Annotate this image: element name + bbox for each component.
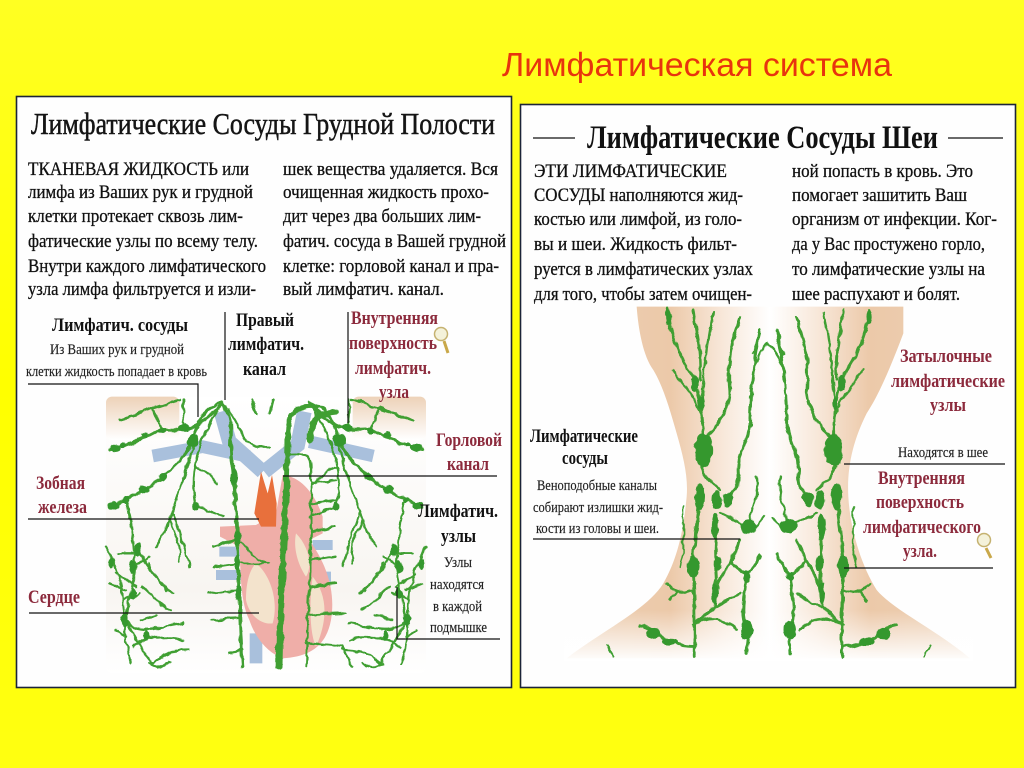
label: neck lymph vessels <box>530 426 663 537</box>
icon: magnifier, chest <box>434 328 448 353</box>
label: right lymphatic duct: канал <box>243 359 286 380</box>
label: inner surface of node <box>863 468 981 562</box>
heading: chest: Лимфатические Сосуды Грудной Полости <box>31 106 495 141</box>
panel: chest lymphatic vessels <box>16 96 512 688</box>
text block: chest, column 1: клетки протекает сквозь лим- <box>28 206 243 227</box>
bottom fade <box>563 610 973 662</box>
label: neck lymph vessels: собирают излишки жид- <box>533 500 663 516</box>
label: neck lymph vessels: кости из головы и шеи. <box>536 521 659 537</box>
label: right lymphatic duct: лимфатич. <box>228 334 304 355</box>
label: occipital nodes: лимфатические <box>891 371 1005 392</box>
text block: neck, column 1: вы и шеи. Жидкость фильт- <box>534 234 737 255</box>
text block: chest, column 2: дит через два больших лим- <box>283 206 481 227</box>
label: lymph vessels: клетки жидкость попадает в кровь <box>26 364 207 380</box>
label: occipital nodes: Затылочные <box>900 346 992 367</box>
label: lymph nodes: Узлы <box>444 555 472 571</box>
label: inner node surface: лимфатич. <box>355 358 431 379</box>
main title: Лимфатическая система <box>502 46 893 83</box>
label: lymph nodes <box>418 501 498 636</box>
text block: chest, column 1: Внутри каждого лимфатического <box>28 256 266 277</box>
label: inner node surface <box>349 308 438 403</box>
label: thoracic duct: Горловой <box>436 430 502 451</box>
chest illustration <box>106 397 426 673</box>
label: inner surface of node: лимфатического <box>863 517 981 538</box>
label: inner surface of node: узла. <box>903 541 937 562</box>
label: lymph vessels: Лимфатич. сосуды <box>52 315 188 336</box>
label: neck lymph vessels: Веноподобные каналы <box>537 478 657 494</box>
text block: neck, column 2: да у Вас простужено горло, <box>792 234 985 255</box>
label: neck lymph vessels: Лимфатические <box>530 426 638 447</box>
label: inner node surface: узла <box>379 382 409 403</box>
text block: chest, column 1: узла лимфа фильтруется и изли- <box>28 279 256 300</box>
label: thymus: железа <box>38 497 87 518</box>
label: inner node surface: Внутренняя <box>351 308 438 329</box>
text block: neck, column 1: для того, чтобы затем очищен- <box>534 284 752 305</box>
text block: chest, column 2: вый лимфатич. канал. <box>283 279 444 300</box>
label: lymph vessels <box>26 315 207 380</box>
text block: neck, column 1: руется в лимфатических узлах <box>534 259 753 280</box>
label: right lymphatic duct: Правый <box>236 310 294 331</box>
torso skin <box>106 397 426 673</box>
text block: neck, column 1: костью или лимфой, из голо- <box>534 209 742 230</box>
icon: magnifier, neck <box>978 534 991 558</box>
label: thymus: Зобная <box>36 473 85 494</box>
text block: chest, column 1 <box>28 159 266 300</box>
text block: neck, column 1: СОСУДЫ наполняются жид- <box>534 185 743 206</box>
heart <box>220 475 332 658</box>
thymus <box>254 472 277 527</box>
neck illustration <box>563 307 973 662</box>
label: thoracic duct: канал <box>447 454 489 475</box>
label: occipital nodes: узлы <box>930 395 966 416</box>
text block: chest, column 2: клетке: горловой канал и пра- <box>283 256 499 277</box>
text block: neck, column 2: организм от инфекции. Ког- <box>792 209 997 230</box>
text block: chest, column 2: фатич. сосуда в Вашей грудной <box>283 231 506 252</box>
lymph network <box>607 309 930 657</box>
text block: chest, column 2 <box>283 159 506 300</box>
text block: neck, column 2: то лимфатические узлы на <box>792 259 986 280</box>
label: thymus <box>36 473 87 518</box>
heading rules <box>533 137 1003 139</box>
leader lines: chest <box>28 312 500 639</box>
label: inner node surface: поверхность <box>349 333 437 354</box>
heading: neck: Лимфатические Сосуды Шеи <box>587 120 938 156</box>
text block: chest, column 1: лимфа из Ваших рук и грудной <box>28 182 253 203</box>
panel: neck lymphatic vessels <box>520 104 1016 688</box>
panel background <box>520 104 1016 688</box>
label: lymph vessels: Из Ваших рук и грудной <box>50 342 184 358</box>
text block: chest, column 2: шек вещества удаляется. Вся <box>283 159 498 180</box>
text block: chest, column 1: ТКАНЕВАЯ ЖИДКОСТЬ или <box>28 159 249 180</box>
text block: neck, column 2: помогает зашитить Ваш <box>792 185 967 206</box>
neck skin <box>567 307 970 658</box>
label: lymph nodes: узлы <box>441 526 476 547</box>
label: thoracic duct <box>436 430 502 475</box>
panel background <box>16 96 512 688</box>
label: lymph nodes: подмышке <box>430 620 487 636</box>
text block: neck, column 2 <box>792 161 997 305</box>
label: lymph nodes: в каждой <box>433 599 482 615</box>
label: right lymphatic duct <box>228 310 304 380</box>
text block: neck, column 2: ной попасть в кровь. Это <box>792 161 973 182</box>
text block: chest, column 1: фатические узлы по всему телу. <box>28 231 258 252</box>
veins <box>153 412 373 663</box>
label: inner surface of node: поверхность <box>876 492 964 513</box>
text block: neck, column 1 <box>534 161 753 305</box>
leader lines: neck <box>533 464 1005 568</box>
text block: chest, column 2: очищенная жидкость прохо- <box>283 182 489 203</box>
label: occipital nodes <box>891 346 1005 416</box>
label: neck lymph vessels: сосуды <box>562 448 608 469</box>
label: lymph nodes: Лимфатич. <box>418 501 498 522</box>
text block: neck, column 1: ЭТИ ЛИМФАТИЧЕСКИЕ <box>534 161 727 182</box>
label: located in neck: Находятся в шее <box>898 445 988 461</box>
text block: neck, column 2: шее распухают и болят. <box>792 284 960 305</box>
lymph network <box>106 400 426 667</box>
label: inner surface of node: Внутренняя <box>878 468 965 489</box>
label: lymph nodes: находятся <box>430 577 484 593</box>
label: heart: Сердце <box>28 587 80 608</box>
